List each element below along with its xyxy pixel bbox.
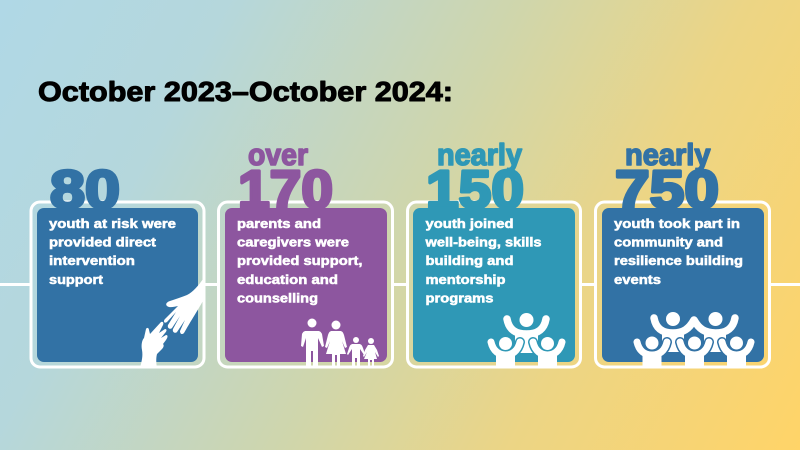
title: October 2023–October 2024: [38, 76, 453, 107]
text: youth at risk description: support [49, 272, 104, 287]
text: programs description: mentorship [426, 272, 506, 287]
text: youth at risk description: intervention [49, 253, 135, 268]
text: events description: community and [614, 235, 723, 250]
text: events description: youth took part in [614, 216, 740, 231]
text: parents description: education and [237, 272, 338, 287]
stat: nearly 150: nearly [437, 137, 523, 172]
text: programs description [424, 216, 542, 305]
text: events description: events [614, 272, 661, 287]
stat: nearly 750: nearly [625, 137, 711, 172]
icon: group of three raising arms [491, 313, 562, 368]
text: parents description: parents and [237, 216, 321, 231]
text: parents description: caregivers were [237, 235, 349, 250]
icon: family [301, 318, 379, 368]
panel: parents and caregivers [218, 137, 392, 368]
panel: youth at risk [31, 160, 205, 368]
stat: over 170 [238, 137, 333, 220]
text: events description [614, 216, 743, 287]
text: programs description: building and [426, 253, 514, 268]
icon: reaching hands [140, 279, 205, 368]
stat: 80: 80 [50, 160, 120, 220]
stat: nearly 750 [615, 137, 719, 220]
panel: well-being programs [408, 137, 580, 368]
text: programs description: youth joined [426, 216, 514, 231]
text: events description: resilience building [614, 253, 743, 268]
text: programs description: programs [426, 290, 494, 305]
stat: nearly 150 [426, 137, 524, 220]
panel: community events [596, 137, 770, 368]
text: youth at risk description: youth at risk were [49, 216, 176, 231]
stat: nearly 750: 750 [615, 160, 719, 220]
icon: group of five raising arms [637, 312, 751, 368]
text: parents description [237, 216, 362, 305]
text: youth at risk description [49, 216, 176, 287]
text: parents description: provided support, [237, 253, 362, 268]
text: programs description: well-being, skills [424, 235, 542, 250]
stat: over 170: over [248, 137, 308, 172]
stat: nearly 150: 150 [426, 160, 524, 220]
text: youth at risk description: provided direct [49, 235, 157, 250]
stat: over 170: 170 [238, 160, 333, 220]
text: parents description: counselling [237, 290, 318, 305]
